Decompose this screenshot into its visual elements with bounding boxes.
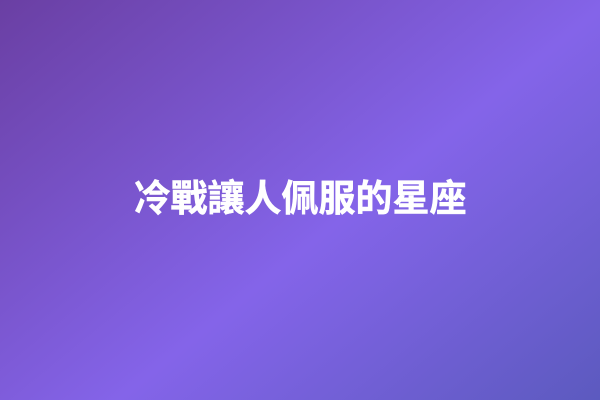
- title: 冷戰讓人佩服的星座: [134, 178, 466, 219]
